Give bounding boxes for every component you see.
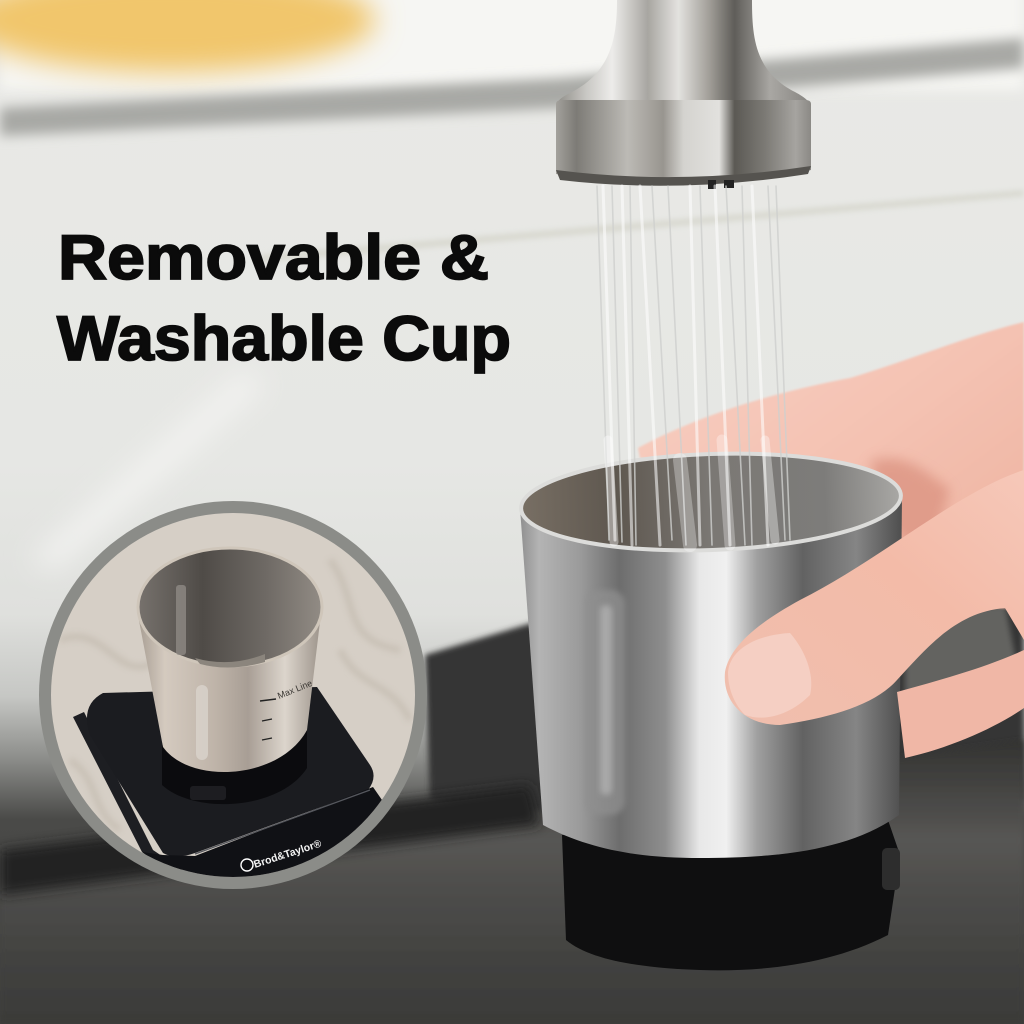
cup base [562, 820, 900, 970]
title: Washable Cup [57, 304, 511, 374]
thumb and fingers [725, 470, 1024, 758]
cup inner wall [519, 447, 903, 557]
hand behind cup [638, 322, 1024, 610]
steel cup [519, 447, 903, 970]
mini cup: Max Line [276, 678, 314, 701]
window groove [585, 590, 625, 815]
title [57, 223, 511, 374]
faucet head [556, 0, 811, 189]
inset photo circle [39, 501, 430, 890]
brand label: Brod&Taylor® [252, 838, 323, 871]
title: Removable & [58, 223, 489, 293]
scale base [73, 687, 382, 877]
mini cup base [162, 730, 307, 804]
water streams [597, 186, 790, 545]
mini cup [137, 548, 322, 772]
countertop [51, 513, 415, 877]
cup body [520, 494, 902, 858]
